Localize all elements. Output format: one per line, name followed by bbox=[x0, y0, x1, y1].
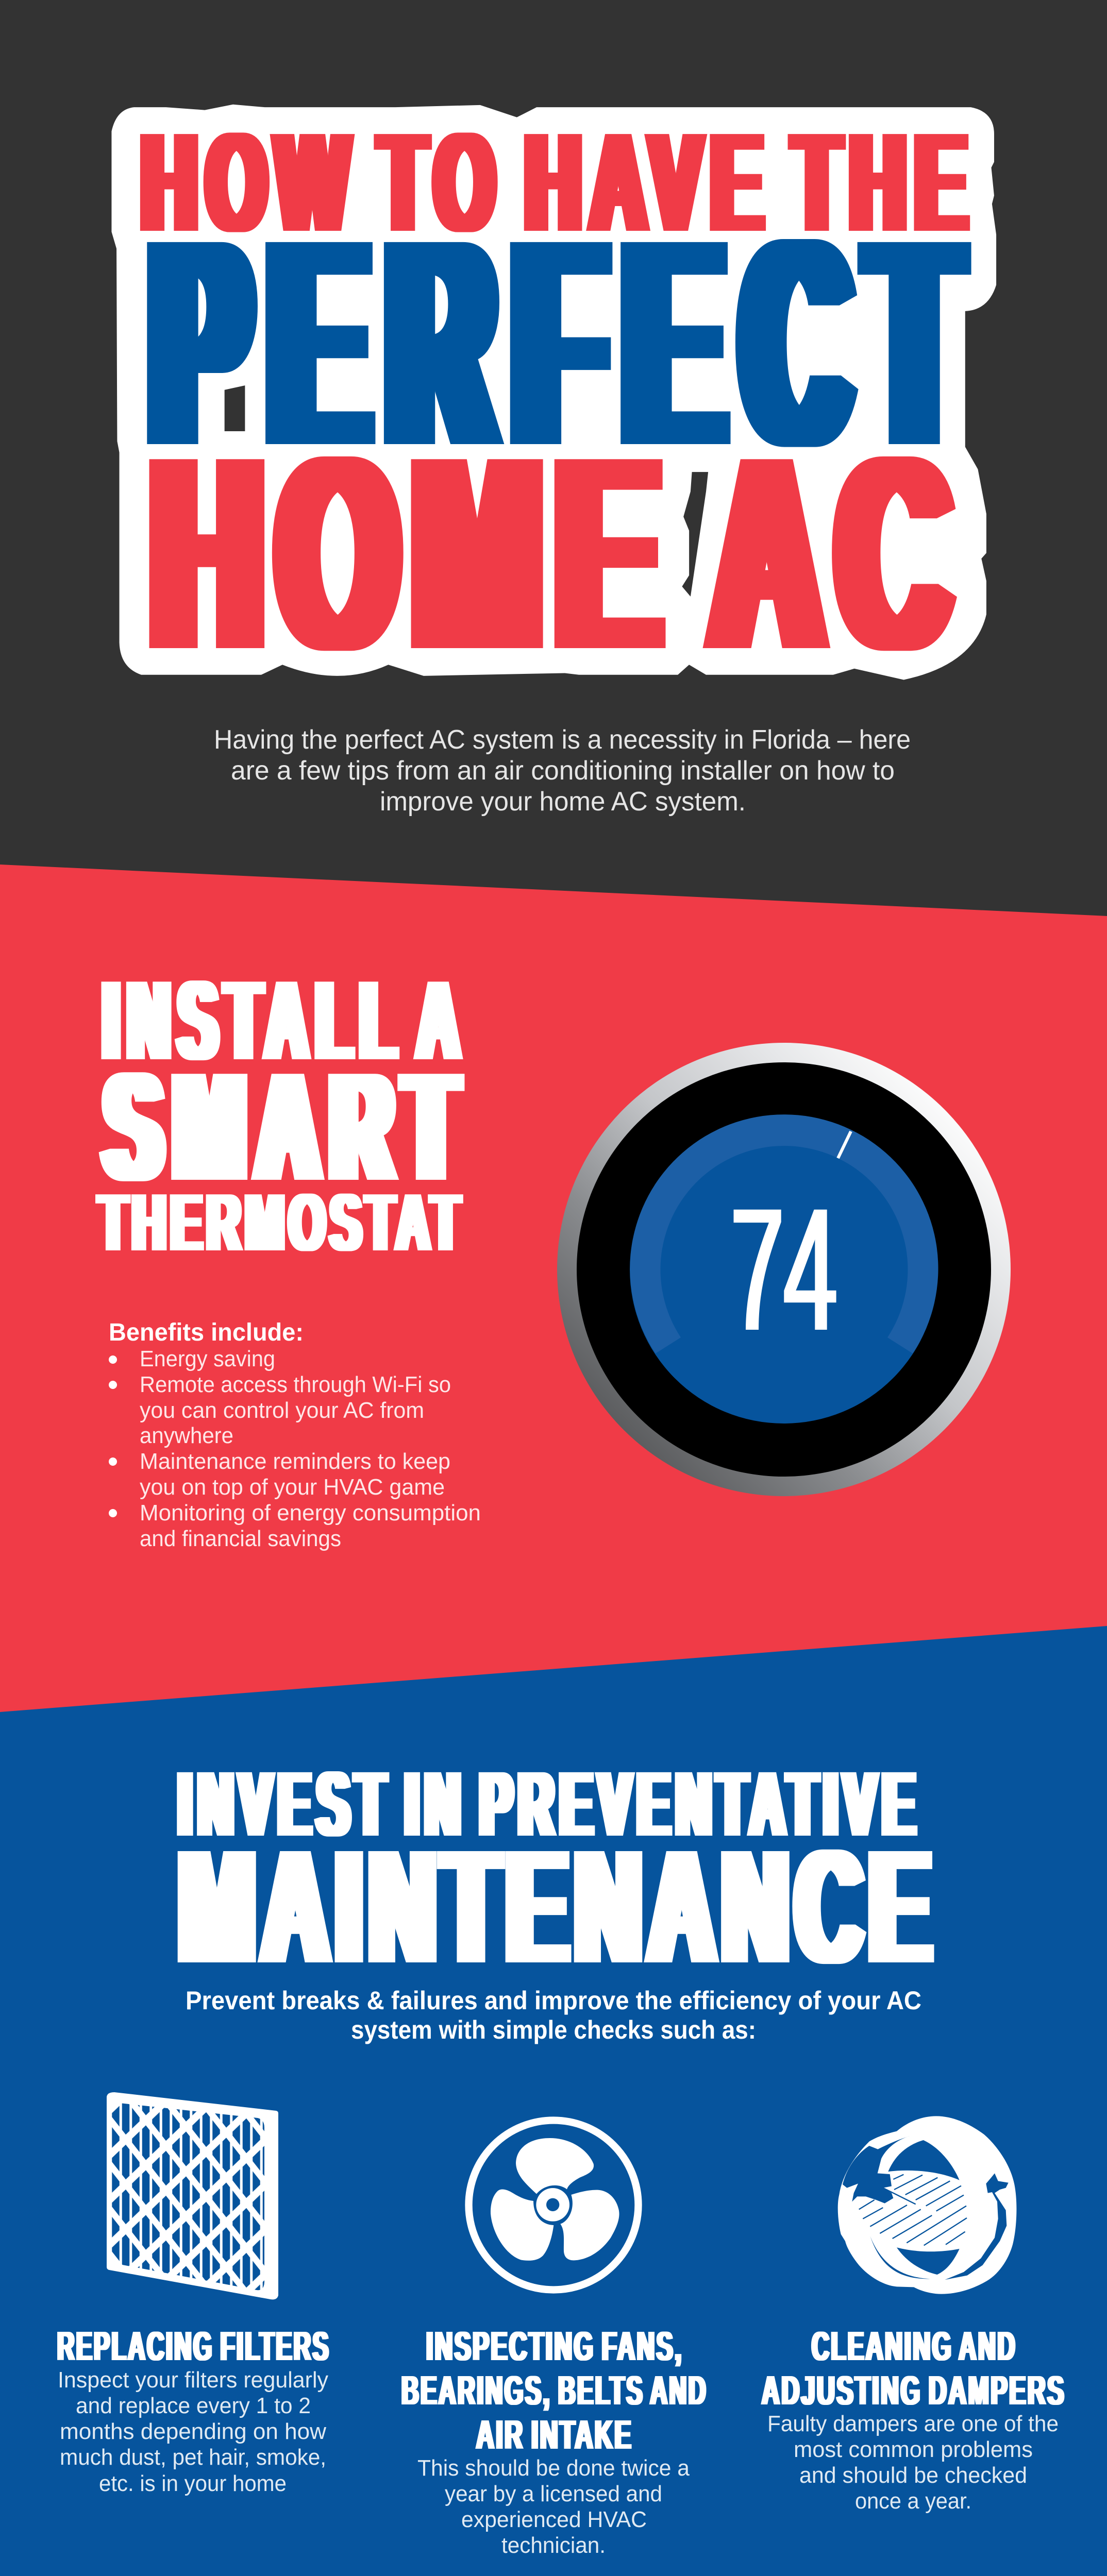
thermostat temperature: 74 bbox=[731, 1172, 837, 1367]
icon: fan bbox=[468, 2120, 638, 2290]
text: replacing filters: much dust, pet hair, smoke, bbox=[60, 2445, 326, 2470]
icon: damper bbox=[838, 2116, 1016, 2294]
intro text bbox=[214, 725, 911, 817]
intro text: improve your home AC system. bbox=[380, 787, 746, 817]
heading: invest in preventative maintenance bbox=[178, 1752, 938, 1997]
benefits list bbox=[109, 1319, 481, 1551]
icon: air filter bbox=[107, 2092, 278, 2299]
heading: install a smart thermostat bbox=[99, 958, 471, 1268]
heading: install a smart thermostat: INSTALL A bbox=[103, 958, 468, 1083]
text: cleaning dampers: most common problems bbox=[794, 2437, 1033, 2462]
text: inspecting fans: experienced HVAC bbox=[461, 2507, 647, 2532]
heading: replacing filters: REPLACING FILTERS bbox=[57, 2323, 330, 2369]
thermostat tick bbox=[838, 1131, 851, 1158]
heading: cleaning dampers bbox=[762, 2323, 1066, 2413]
column: inspecting fans bbox=[401, 2120, 708, 2558]
maintenance intro text: system with simple checks such as: bbox=[351, 2015, 756, 2044]
heading: inspecting fans: INSPECTING FANS, bbox=[426, 2323, 683, 2369]
heading: inspecting fans bbox=[401, 2323, 708, 2458]
text: replacing filters: months depending on how bbox=[60, 2419, 326, 2444]
panel: red thermostat background bbox=[0, 865, 1107, 1752]
text: replacing filters: etc. is in your home bbox=[99, 2471, 287, 2496]
text: replacing filters: Inspect your filters regularly bbox=[58, 2367, 328, 2393]
benefits list: you on top of your HVAC game bbox=[140, 1475, 445, 1500]
benefits list: Maintenance reminders to keep bbox=[140, 1449, 450, 1474]
heading: inspecting fans: BEARINGS, BELTS AND bbox=[401, 2367, 708, 2413]
text: inspecting fans: This should be done twice a bbox=[417, 2455, 690, 2481]
heading: inspecting fans: AIR INTAKE bbox=[476, 2412, 633, 2458]
heading: install a smart thermostat: THERMOSTAT bbox=[99, 1177, 465, 1268]
text: cleaning dampers: and should be checked bbox=[799, 2463, 1027, 2488]
benefits list: you can control your AC from bbox=[140, 1398, 424, 1423]
column: replacing filters bbox=[57, 2092, 330, 2496]
thermostat blue dial bbox=[630, 1115, 938, 1423]
intro text: are a few tips from an air conditioning installer on how to bbox=[231, 756, 895, 786]
thermostat metal ring bbox=[557, 1043, 1011, 1496]
benefits list: Monitoring of energy consumption bbox=[140, 1500, 481, 1526]
maintenance intro text: Prevent breaks & failures and improve the efficiency of your AC bbox=[186, 1986, 921, 2015]
benefits list: anywhere bbox=[140, 1423, 233, 1448]
text: inspecting fans bbox=[417, 2455, 690, 2558]
maintenance intro text bbox=[186, 1986, 921, 2044]
heading: install a smart thermostat: SMART bbox=[106, 1041, 471, 1213]
thermostat black bezel bbox=[577, 1062, 991, 1477]
thermostat lighter arc bbox=[630, 1114, 938, 1353]
text: cleaning dampers bbox=[767, 2411, 1059, 2514]
panel: blue maintenance background bbox=[0, 1626, 1107, 2576]
benefits list: and financial savings bbox=[140, 1526, 341, 1551]
panel: dark intro background bbox=[0, 0, 1107, 927]
thermostat illustration bbox=[557, 1043, 1011, 1496]
title sticker outline bbox=[111, 105, 996, 680]
benefits list: Benefits include: bbox=[109, 1319, 304, 1346]
column: cleaning dampers bbox=[762, 2116, 1066, 2514]
title block bbox=[111, 104, 996, 706]
text: inspecting fans: technician. bbox=[501, 2533, 606, 2558]
text: cleaning dampers: Faulty dampers are one of the bbox=[767, 2411, 1059, 2436]
benefits list: Energy saving bbox=[140, 1346, 275, 1371]
text: replacing filters: and replace every 1 to 2 bbox=[76, 2393, 311, 2418]
intro text: Having the perfect AC system is a necessity in Florida – here bbox=[214, 725, 911, 755]
text: replacing filters bbox=[58, 2367, 328, 2496]
benefits list: Remote access through Wi-Fi so bbox=[140, 1372, 451, 1397]
text: cleaning dampers: once a year. bbox=[855, 2488, 971, 2514]
text: inspecting fans: year by a licensed and bbox=[445, 2481, 662, 2506]
